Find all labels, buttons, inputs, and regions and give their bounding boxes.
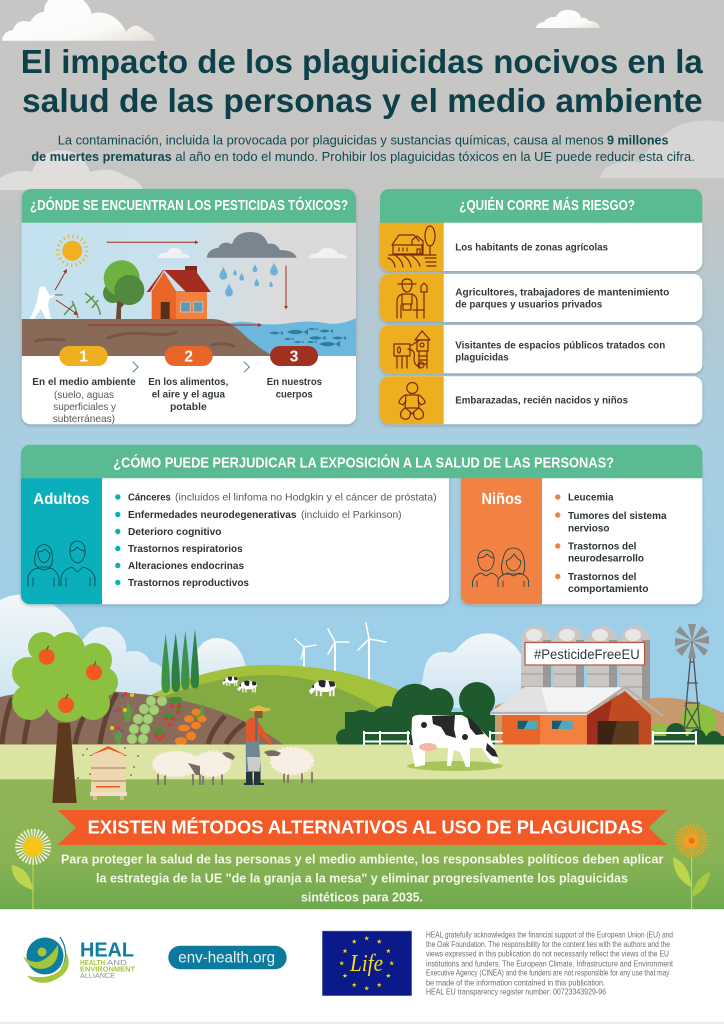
logo: EU Life — [322, 931, 412, 996]
sheep — [153, 748, 313, 785]
list: child health effects: Leucemia — [568, 492, 614, 504]
card: adults — [21, 460, 449, 604]
hill: green — [147, 665, 420, 745]
call to action text: Para proteger la salud de las personas y el medio ambiente, los responsables políticos deben aplicar — [61, 851, 663, 866]
intro text: al año en todo el mundo. Prohibir los plaguicidas tóxicos en la UE puede reducir esta cifra. — [175, 149, 695, 164]
row: pregnant, newborns and children — [380, 376, 702, 424]
list: child health effects: comportamiento — [568, 583, 648, 595]
step 3: En nuestros — [267, 376, 322, 388]
disclaimer: views expressed in this publication do not necessarily reflect the views of the EU — [426, 949, 669, 959]
list: adult health effects: Cánceres — [128, 492, 171, 504]
water with fish — [225, 318, 356, 356]
logo: HEAL: ALLIANCE — [80, 973, 115, 980]
beehive — [77, 746, 139, 800]
fences — [363, 731, 697, 745]
list: adult health effects: Alteraciones endocrinas — [128, 560, 244, 572]
windmill — [675, 624, 709, 730]
barn — [490, 687, 663, 745]
step 1 — [32, 346, 136, 425]
disclaimer: HEAL EU transparency register number: 00723343929-96 — [426, 987, 606, 997]
icon: sunflower left — [12, 834, 46, 909]
intro text: de muertes prematuras — [31, 149, 172, 164]
scene: farm landscape — [0, 623, 724, 909]
list: adult health effects: Deterioro cognitivo — [128, 526, 222, 538]
list: child health effects: neurodesarrollo — [568, 553, 644, 565]
list: child health effects: Trastornos del — [568, 571, 636, 583]
cypress trees — [161, 629, 199, 693]
icon: sunflower right — [673, 829, 710, 909]
call to action text — [61, 851, 663, 905]
panel header: ¿QUIÉN CORRE MÁS RIESGO? — [459, 197, 635, 214]
step 2: el aire y el agua — [152, 389, 225, 401]
card: children — [461, 460, 702, 604]
logo: EU Life: Life — [349, 951, 383, 977]
logo: HEAL: HEAL — [80, 939, 134, 962]
intro text: 9 millones — [607, 133, 668, 148]
icon: tree — [103, 260, 144, 319]
step 1: superficiales y — [53, 401, 117, 413]
panel: who is most at risk — [380, 189, 702, 424]
step 1: 1 — [79, 349, 88, 366]
arrows — [55, 240, 288, 327]
website pill: env-health.org — [178, 949, 275, 966]
list: adult health effects: Trastornos reproductivos — [128, 577, 249, 589]
panel header: ¿DÓNDE SE ENCUENTRAN LOS PESTICIDAS TÓXICOS? — [30, 196, 348, 214]
logo: HEAL: HEALTH — [80, 960, 105, 967]
cloud: middle right — [600, 120, 724, 178]
illustration: pesticide cycle — [22, 222, 356, 356]
panel: health effects — [21, 445, 702, 604]
sign: #PesticideFreeEU — [525, 642, 644, 665]
list: adult health effects: Enfermedades neurodegenerativas — [128, 509, 297, 521]
row: visitors to public spaces: plaguicidas — [455, 352, 509, 364]
step 1: subterráneas) — [53, 413, 115, 425]
step 1: En el medio ambiente — [32, 376, 136, 388]
scene: background clouds — [0, 594, 524, 710]
step 3: cuerpos — [276, 389, 313, 401]
card: adults: Adultos — [33, 491, 90, 508]
icon: sun — [58, 236, 87, 265]
cloud: top left — [2, 0, 155, 41]
row: farmers and workers: de parques y usuarios privados — [455, 299, 602, 311]
call to action text: la estrategia de la UE "de la granja a la mesa" y eliminar progresivamente los plaguicidas — [96, 870, 628, 885]
intro text — [31, 133, 695, 164]
logo: HEAL: ENVIRONMENT — [80, 966, 136, 974]
icon: person spraying — [30, 286, 63, 319]
cloud: middle left — [0, 150, 143, 190]
large cow — [407, 715, 503, 771]
banner: EXISTEN MÉTODOS ALTERNATIVOS AL USO DE PLAGUICIDAS — [88, 816, 643, 837]
list: child health effects — [555, 492, 667, 595]
row: farmers and workers — [380, 274, 702, 322]
list: adult health effects — [115, 492, 437, 589]
title: El impacto de los plaguicidas nocivos en la — [21, 44, 703, 81]
step 2: 2 — [184, 349, 193, 366]
banner — [58, 810, 667, 845]
row: rural residents: Los habitants de zonas agrícolas — [455, 242, 608, 254]
silos — [521, 626, 650, 700]
list: adult health effects: Trastornos respiratorios — [128, 543, 243, 555]
ground — [22, 319, 273, 356]
intro text: La contaminación, incluida la provocada por plaguicidas y sustancias químicas, causa al menos — [58, 133, 604, 148]
list: adult health effects: (incluidos el linfoma no Hodgkin y el cáncer de próstata) — [175, 492, 437, 504]
field: brown hill — [0, 690, 283, 744]
panel: where toxic pesticides are found — [22, 189, 356, 425]
website pill — [168, 946, 287, 969]
list: child health effects: nervioso — [568, 522, 610, 534]
row: rural residents — [380, 215, 702, 271]
logo: HEAL: AND — [107, 960, 127, 967]
small cows — [222, 676, 336, 696]
disclaimer: institutions and funders. The European Climate, Infrastructure and Environment — [426, 958, 673, 968]
list: child health effects: Trastornos del — [568, 540, 636, 552]
icon: plants — [64, 293, 100, 318]
hill: tan — [495, 698, 724, 745]
chevron — [244, 362, 249, 372]
row: visitors to public spaces: Visitantes de espacios públicos tratados con — [455, 340, 665, 352]
panel header — [22, 189, 356, 223]
logo: HEAL — [23, 937, 136, 983]
icon: house — [147, 266, 211, 319]
call to action text: sintéticos para 2035. — [301, 890, 423, 905]
chevron — [133, 362, 138, 372]
step 2 — [148, 346, 228, 413]
cloud: top right — [536, 10, 600, 28]
panel header — [380, 189, 702, 223]
step 1: (suelo, aguas — [54, 389, 114, 401]
farmer — [244, 706, 272, 785]
row: pregnant, newborns and children: Embarazadas, recién nacidos y niños — [455, 395, 628, 407]
ground — [0, 744, 724, 909]
step 3: 3 — [290, 349, 299, 366]
icon: children — [472, 548, 529, 587]
list: child health effects: Tumores del sistema — [568, 510, 667, 522]
step 2: En los alimentos, — [148, 376, 228, 388]
disclaimer — [426, 930, 673, 997]
step 2: potable — [170, 401, 207, 413]
icon: adults — [28, 541, 95, 586]
list: adult health effects: (incluido el Parkinson) — [301, 509, 402, 521]
vegetable rows — [110, 692, 206, 745]
panel header — [21, 445, 702, 478]
apple tree — [12, 632, 118, 803]
title — [21, 44, 703, 120]
title: salud de las personas y el medio ambiente — [22, 83, 703, 120]
step 3 — [267, 346, 322, 401]
icon: rain cloud — [207, 232, 297, 296]
bushes — [336, 682, 495, 747]
sign: #PesticideFreeEU: #PesticideFreeEU — [534, 646, 640, 662]
row: visitors to public spaces — [380, 325, 702, 373]
row: farmers and workers: Agricultores, trabajadores de mantenimiento — [455, 287, 669, 299]
wind turbines — [295, 623, 386, 680]
panel header: ¿CÓMO PUEDE PERJUDICAR LA EXPOSICIÓN A LA SALUD DE LAS PERSONAS? — [113, 453, 614, 471]
card: children: Niños — [482, 491, 522, 508]
light bushes right — [651, 704, 724, 747]
disclaimer: be made of the information contained in this publication. — [426, 977, 605, 987]
footer — [0, 909, 724, 1024]
